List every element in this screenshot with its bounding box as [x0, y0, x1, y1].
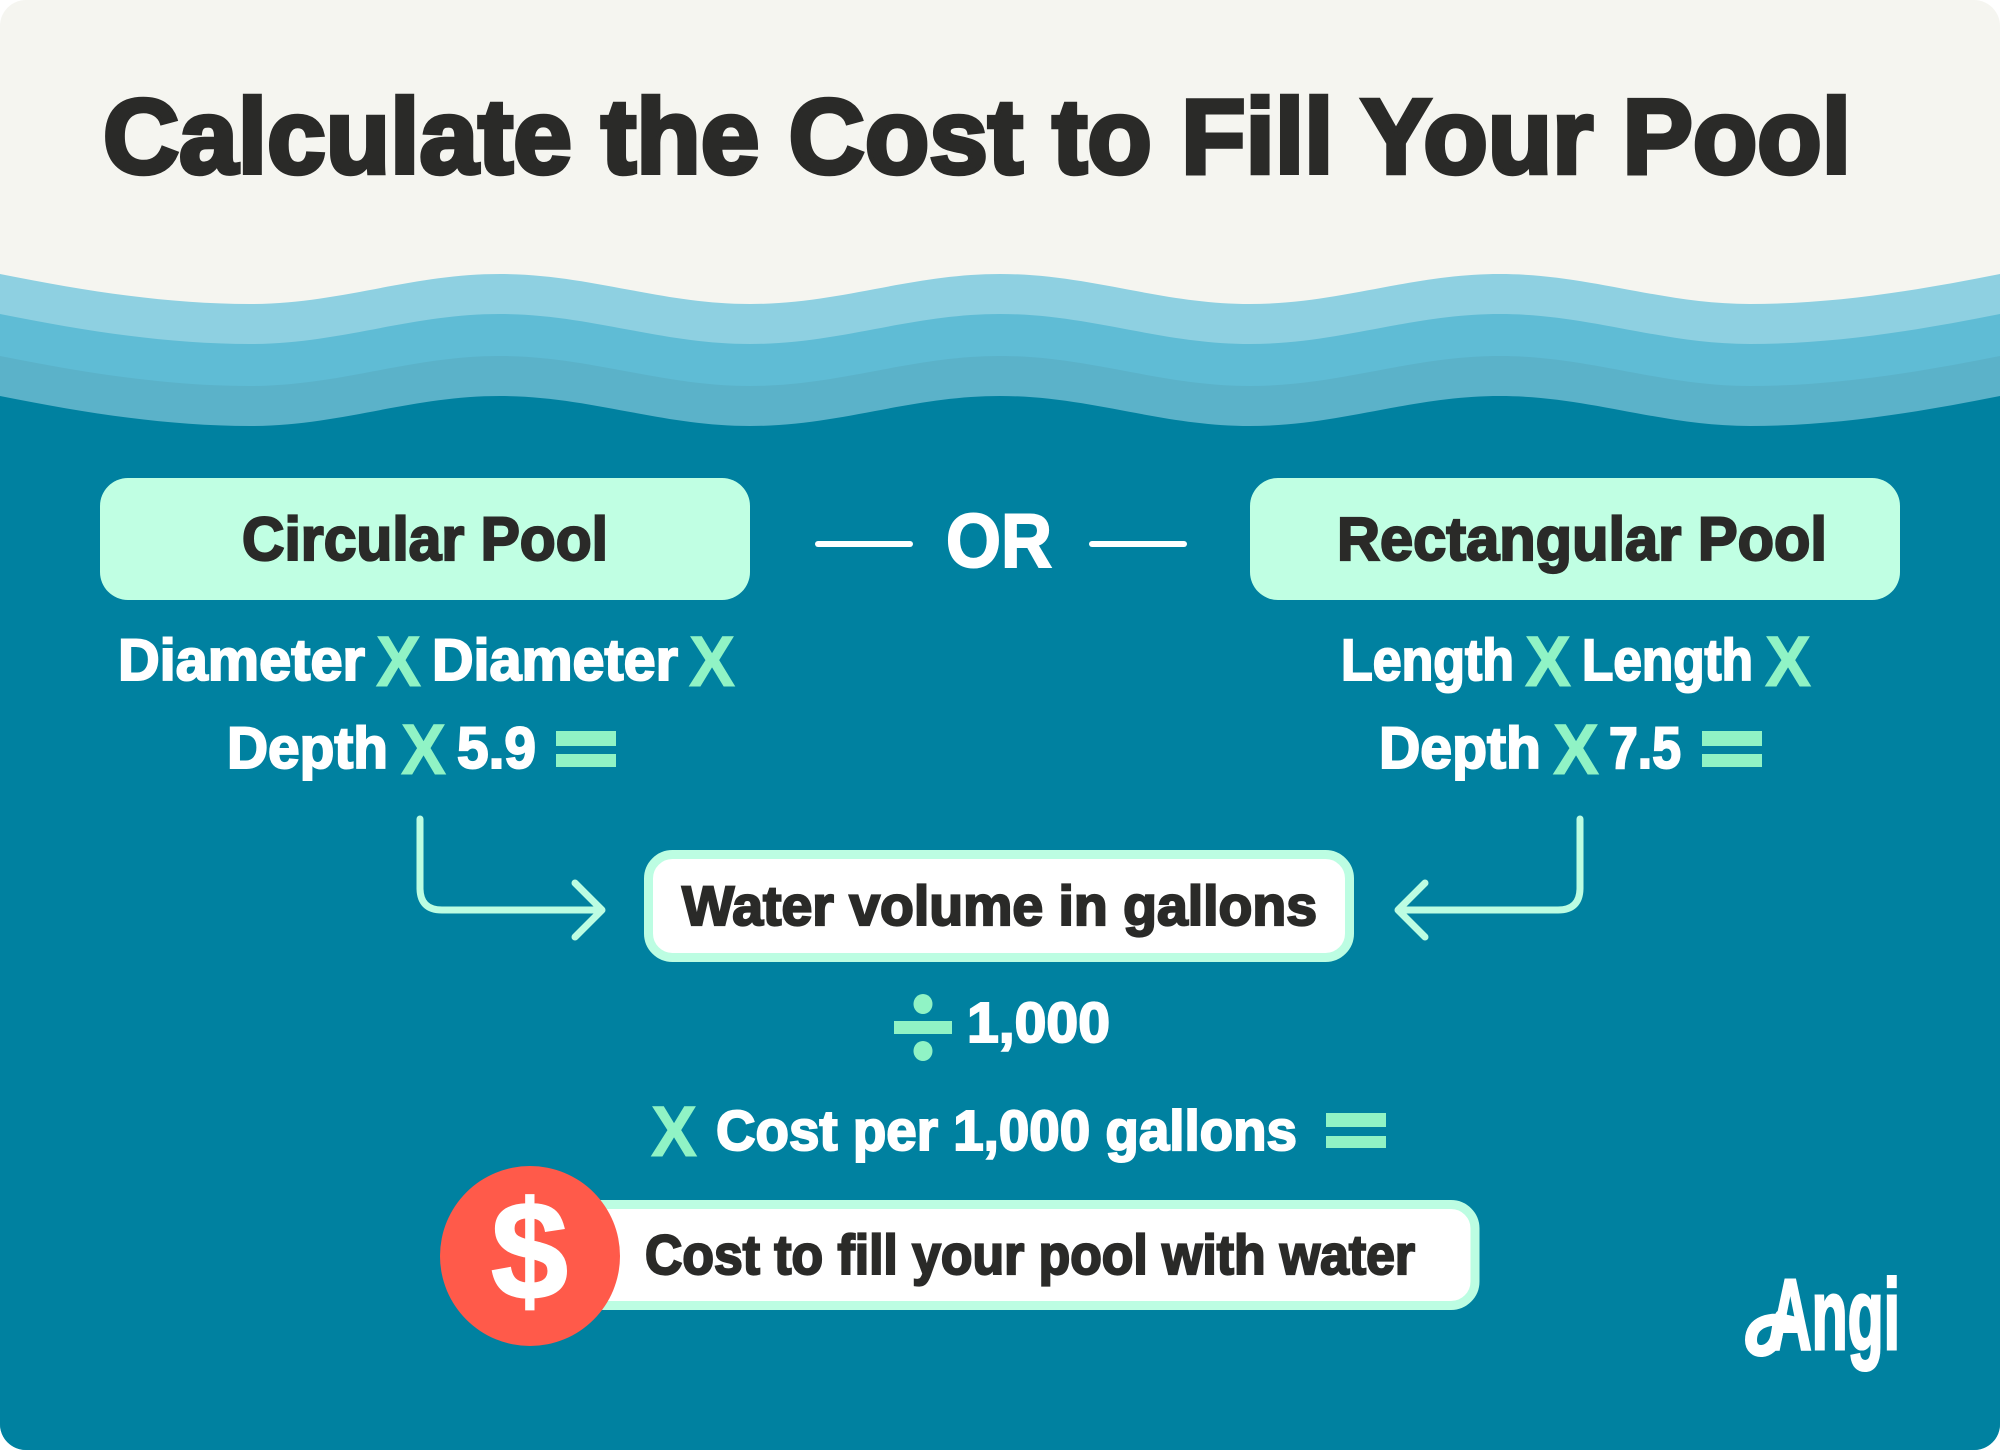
arrow: rectangular to volume [1398, 819, 1580, 937]
water volume box: Water volume in gallons [682, 874, 1317, 937]
title: Calculate the Cost to Fill Your Pool [103, 78, 1851, 196]
panel: circular pool formula [100, 478, 750, 790]
formula line 1: length x length x: X [1765, 623, 1811, 702]
heading: rectangular pool [1250, 478, 1900, 600]
logo: Angi: Angi [1769, 1259, 1900, 1371]
formula line 1: length x length x: Length [1341, 628, 1514, 693]
arrow: circular to volume [420, 819, 602, 937]
heading: circular pool: Circular Pool [242, 505, 608, 573]
formula line 2: depth x 7.5 = [1379, 711, 1762, 790]
formula line 2: depth x 7.5 =: Depth [1379, 716, 1541, 781]
formula line 2: depth x 5.9 = [227, 711, 616, 790]
formula line 2: depth x 7.5 =: 7.5 [1609, 716, 1681, 781]
panel: rectangular pool formula [1250, 478, 1900, 790]
heading: circular pool [100, 478, 750, 600]
formula line 1: diameter x diameter x: Diameter [432, 628, 678, 693]
heading: rectangular pool: Rectangular Pool [1337, 505, 1827, 573]
formula line 1: diameter x diameter x: X [689, 623, 735, 702]
divide by 1,000: 1,000 [967, 991, 1110, 1055]
formula line 1: length x length x: X [1525, 623, 1571, 702]
formula line 1: diameter x diameter x: Diameter [118, 628, 365, 693]
multiply by cost per 1,000 gallons: X [651, 1093, 697, 1172]
result box: cost to fill [540, 1204, 1475, 1306]
icon: dollar coin [440, 1166, 620, 1346]
or divider: OR [946, 499, 1052, 584]
formula line 1: diameter x diameter x [118, 623, 735, 702]
divide by 1,000 [894, 991, 1110, 1061]
formula line 1: length x length x: Length [1582, 628, 1753, 693]
icon: dollar coin: $ [491, 1172, 568, 1329]
or divider [815, 499, 1187, 584]
result box: cost to fill: Cost to fill your pool with water [645, 1223, 1415, 1286]
multiply by cost per 1,000 gallons [651, 1093, 1386, 1172]
formula line 2: depth x 5.9 =: X [401, 711, 446, 790]
multiply by cost per 1,000 gallons: Cost per 1,000 gallons [716, 1099, 1297, 1163]
formula line 2: depth x 7.5 =: X [1553, 711, 1599, 790]
logo: Angi [1751, 1259, 1900, 1371]
water volume box [648, 854, 1350, 958]
formula line 2: depth x 5.9 =: Depth [227, 716, 388, 781]
formula line 2: depth x 5.9 =: 5.9 [457, 716, 536, 781]
formula line 1: length x length x [1341, 623, 1811, 702]
formula line 1: diameter x diameter x: X [376, 623, 421, 702]
